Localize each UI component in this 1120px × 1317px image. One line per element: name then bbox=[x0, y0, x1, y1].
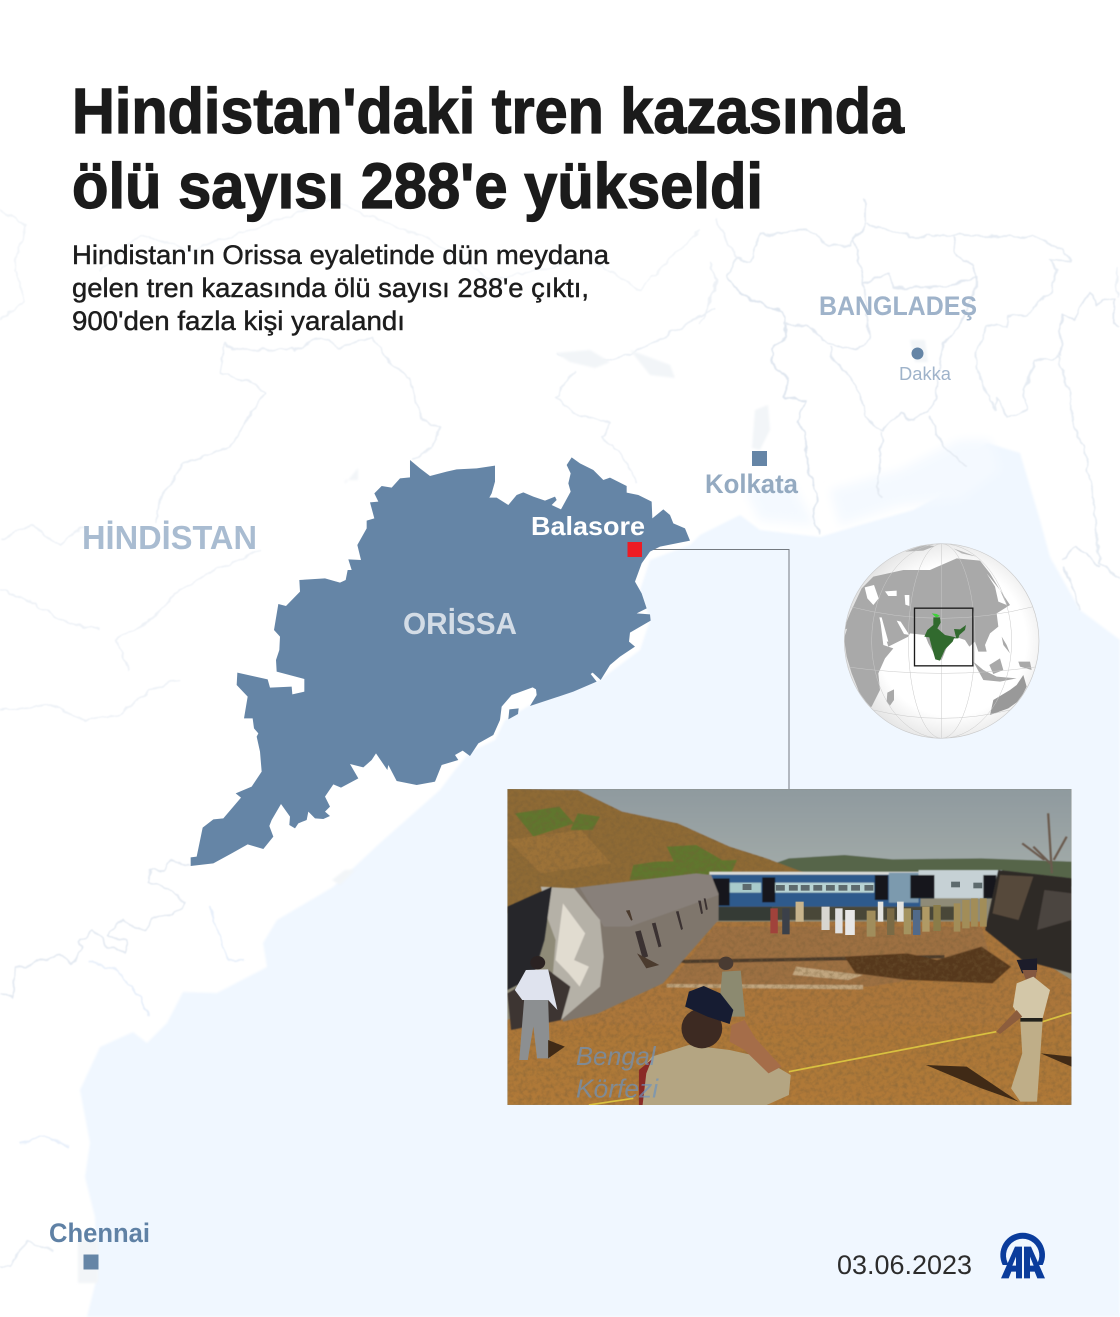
subtitle text bbox=[72, 240, 610, 336]
ground bbox=[507, 922, 1071, 1105]
city marker: Dakka bbox=[899, 348, 952, 384]
right wreck bbox=[985, 870, 1071, 973]
region label: Orissa: ORİSSA bbox=[403, 606, 517, 641]
subtitle text: gelen tren kazasında ölü sayısı 288'e çıktı, bbox=[72, 273, 589, 303]
person: left, white shirt bbox=[515, 956, 557, 1060]
title: Hindistan'daki tren kazasında bbox=[72, 75, 904, 147]
Arctic islands bbox=[905, 545, 977, 557]
logo: Anadolu Ajansı bbox=[1000, 1233, 1045, 1278]
photo: derailed train bbox=[507, 789, 1071, 1105]
Bangladesh region lines bbox=[700, 200, 1120, 610]
city marker: Kolkata: Kolkata bbox=[705, 469, 799, 499]
standing train bbox=[709, 874, 920, 907]
Australia bbox=[990, 675, 1027, 715]
city marker: Dakka: Dakka bbox=[899, 363, 952, 384]
title: ölü sayısı 288'e yükseldi bbox=[72, 150, 763, 222]
distant hills bbox=[778, 854, 1072, 886]
Africa bbox=[844, 620, 894, 707]
city marker: Chennai: Chennai bbox=[49, 1218, 150, 1248]
city marker: Kolkata bbox=[705, 451, 799, 499]
title bbox=[72, 75, 904, 222]
river delta tint bbox=[745, 440, 1000, 525]
connector line: Balasore to photo bbox=[648, 550, 789, 790]
region shape: Orissa bbox=[191, 457, 690, 866]
shadows bbox=[548, 1040, 1071, 1102]
locator frame bbox=[914, 608, 973, 666]
city marker: Balasore: Balasore bbox=[531, 511, 645, 541]
ground and hillside grain bbox=[507, 789, 1071, 1105]
sea: Bay of Bengal bbox=[80, 443, 1120, 1317]
central India lines bbox=[225, 337, 441, 460]
subtitle text: Hindistan'ın Orissa eyaletinde dün meydana bbox=[72, 240, 610, 270]
inland seas bbox=[865, 573, 1007, 642]
faint map label behind photo bbox=[576, 1041, 659, 1103]
Eurasia landmass bbox=[843, 558, 1010, 660]
policeman: foreground bbox=[639, 986, 791, 1105]
train windows bbox=[743, 882, 982, 891]
faint map label behind photo: Bengal bbox=[576, 1041, 656, 1071]
overturned coach bbox=[556, 873, 719, 1022]
rope bbox=[589, 1013, 1071, 1105]
crowd bbox=[770, 898, 987, 937]
subtitle text: 900'den fazla kişi yaralandı bbox=[72, 306, 405, 336]
city marker: Chennai bbox=[49, 1218, 150, 1270]
lakes and city tints bbox=[78, 340, 928, 1283]
coach windows bbox=[635, 898, 708, 958]
country label: Hindistan: HİNDİSTAN bbox=[82, 519, 257, 556]
date: 03.06.2023 bbox=[837, 1250, 972, 1280]
country label: Bangladeş: BANGLADEŞ bbox=[819, 291, 977, 321]
Southeast Asia and Indonesia bbox=[973, 662, 1017, 682]
city marker: Balasore bbox=[531, 511, 645, 557]
policeman: right bbox=[996, 958, 1050, 1102]
sky bbox=[507, 789, 1071, 889]
coach crushed end bbox=[541, 887, 604, 1020]
person: standing mid bbox=[719, 957, 745, 1017]
southern lines bbox=[0, 862, 243, 1267]
hillside bbox=[507, 789, 815, 913]
locator globe bbox=[843, 544, 1039, 738]
bare tree bbox=[1022, 813, 1067, 873]
graticule bbox=[845, 544, 1038, 738]
Madagascar bbox=[887, 689, 894, 706]
India bbox=[924, 617, 966, 661]
faint map label behind photo: Körfezi bbox=[576, 1074, 659, 1103]
